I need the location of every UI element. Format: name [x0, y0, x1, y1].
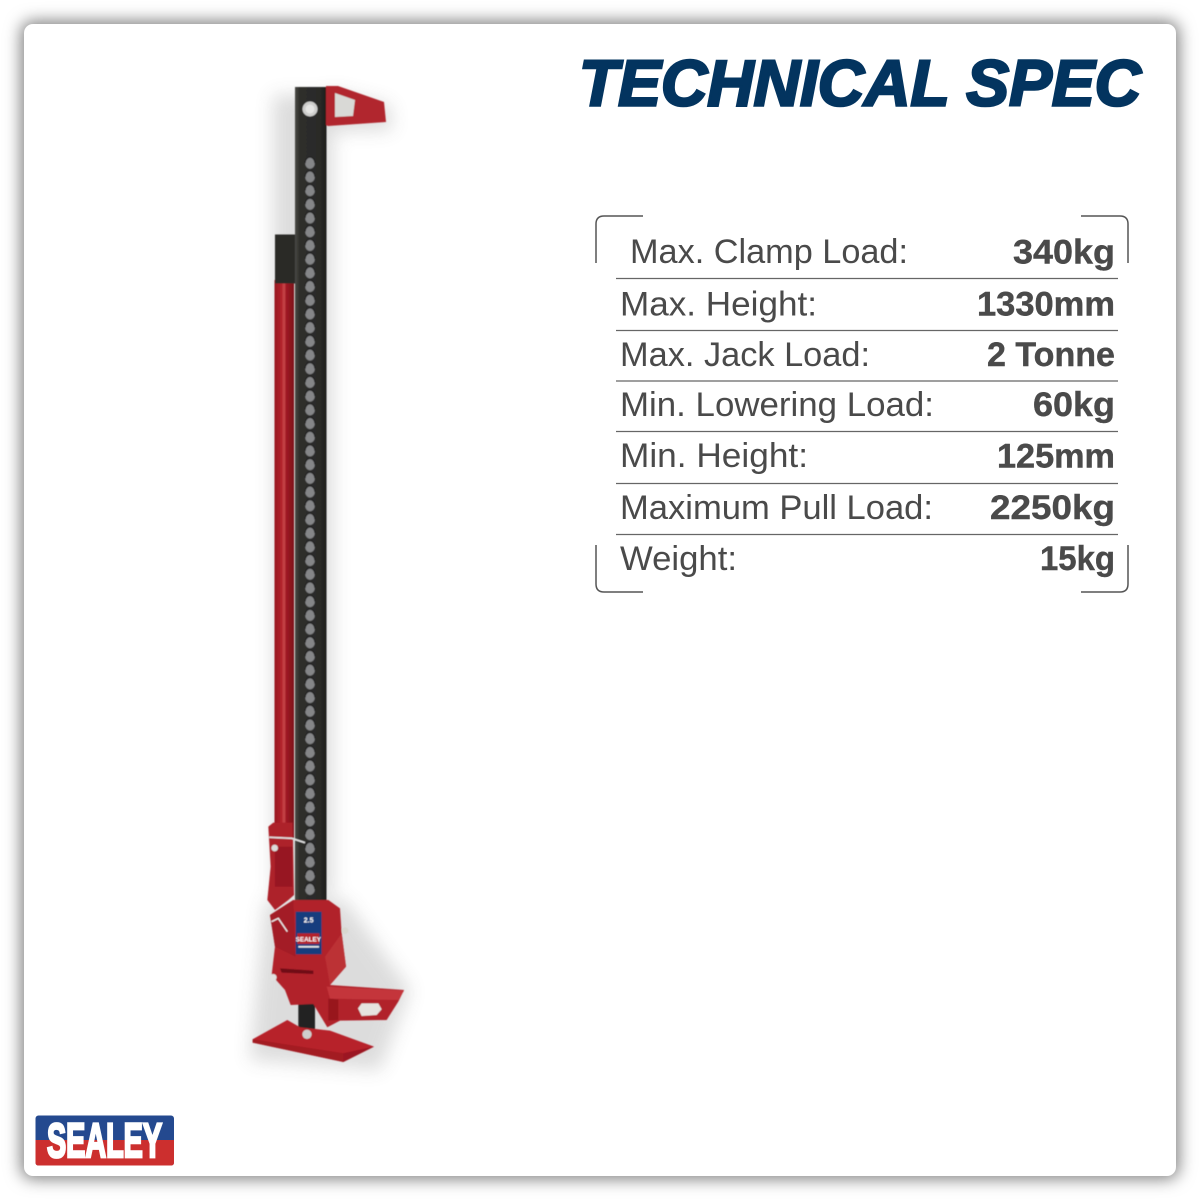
steel bar	[295, 87, 326, 907]
row: maximum pull load: 2250kg	[990, 489, 1115, 527]
bracket: bottom right	[1081, 545, 1128, 592]
row: weight: 15kg	[1040, 540, 1115, 578]
foot plate	[253, 1020, 374, 1062]
jack shadow	[250, 90, 410, 1070]
blue rating label: 2.5	[304, 918, 314, 925]
lever collar	[267, 823, 294, 910]
title: TECHNICAL SPEC	[579, 46, 1142, 120]
row: maximum pull load: Maximum Pull Load:	[620, 489, 933, 527]
row: min height: 125mm	[997, 438, 1115, 476]
top bracket	[326, 86, 386, 126]
row: min height	[620, 437, 1115, 476]
lever ring hole	[358, 1003, 382, 1016]
row: max height: 1330mm	[977, 286, 1115, 324]
row: max jack load: 2 Tonne	[987, 336, 1115, 374]
housing	[270, 900, 404, 1027]
row: min lowering load: 60kg	[1033, 386, 1115, 424]
bracket window	[335, 93, 355, 117]
row: max jack load: Max. Jack Load:	[620, 336, 870, 374]
blue rating label: SEALEY	[296, 936, 322, 943]
spec table	[596, 216, 1128, 592]
product photo: high lift jack	[250, 86, 410, 1070]
logo: Sealey: SEALEY	[47, 1115, 162, 1168]
row: max clamp load: 340kg	[1013, 234, 1115, 272]
row: min lowering load	[620, 386, 1115, 424]
climbing nut	[302, 1030, 312, 1039]
bar holes	[295, 156, 326, 896]
row: maximum pull load	[620, 489, 1115, 527]
row: weight: Weight:	[620, 540, 737, 578]
lower mechanism	[253, 823, 404, 1062]
safety pin	[269, 837, 305, 843]
row: max clamp load	[630, 233, 1115, 272]
blue rating label	[296, 912, 322, 954]
row: max height	[620, 286, 1115, 324]
black bar lower section	[298, 1000, 315, 1033]
bracket: bottom left	[596, 545, 643, 592]
bracket: top left	[596, 216, 643, 263]
row: max height: Max. Height:	[620, 286, 817, 324]
row: min lowering load: Min. Lowering Load:	[620, 386, 934, 424]
black lever grip	[275, 234, 295, 284]
red lever tube	[274, 280, 294, 840]
row: max jack load	[620, 336, 1115, 374]
pin	[272, 918, 287, 932]
row: weight	[620, 540, 1115, 578]
row: max clamp load: Max. Clamp Load:	[630, 233, 908, 271]
bracket: top right	[1081, 216, 1128, 263]
row: min height: Min. Height:	[620, 437, 808, 475]
top bolt	[302, 102, 318, 116]
logo: Sealey	[36, 1115, 174, 1168]
